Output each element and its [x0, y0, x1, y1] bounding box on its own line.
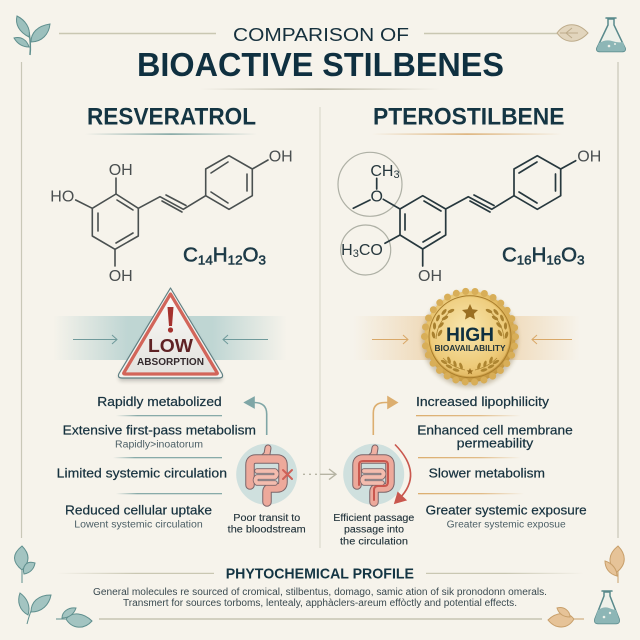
caption: efficient passage — [333, 513, 415, 547]
icon: teal leaf bottom — [56, 608, 92, 627]
absorption band — [53, 316, 287, 360]
chemical structure: pterostilbene: 3 — [353, 248, 359, 260]
molecular formula: resveratrol: O — [243, 244, 259, 266]
icon: orange leaves top right — [605, 546, 624, 583]
list: resveratrol properties: Lowent systemic circulation — [74, 520, 203, 531]
icon: flask bottom right — [595, 591, 619, 624]
heading: resveratrol: RESVERATROL — [87, 104, 256, 130]
list: pterostilbene properties: permeability — [457, 436, 534, 450]
molecular formula: resveratrol: 3 — [259, 252, 266, 268]
caption: efficient passage: passage into — [344, 525, 404, 536]
footer body text: Transmert for sources torboms, lentealy, apphàclers-areum effòctly and potential effects. — [123, 598, 517, 609]
molecular formula: resveratrol: 14 — [198, 252, 213, 268]
frame lines and central divider — [22, 62, 618, 548]
footer — [14, 546, 624, 627]
arrow: inward right — [223, 335, 268, 344]
list: pterostilbene properties: Increased lipophilicity — [416, 394, 550, 409]
exclamation mark — [168, 307, 174, 326]
badge text: low: LOW — [148, 336, 193, 356]
molecular formula: resveratrol: C — [183, 244, 197, 266]
footer rule left — [57, 573, 214, 574]
footer body text — [93, 587, 547, 609]
chemical structure: pterostilbene: CO — [359, 242, 383, 259]
caption: poor transit — [228, 513, 306, 536]
arrow: inward right — [532, 335, 572, 344]
list: pterostilbene properties: Enhanced cell membrane — [417, 422, 573, 437]
badge: high bioavailability — [422, 291, 518, 388]
arrow: dotted comparison — [303, 469, 336, 480]
molecular formula: pterostilbene: H — [532, 244, 546, 266]
molecular formula: resveratrol: 12 — [228, 252, 243, 268]
caption: poor transit: the bloodstream — [228, 525, 306, 536]
icon: teal leaves top left — [14, 546, 35, 583]
chemical structure: pterostilbene: 3 — [393, 169, 400, 181]
list: pterostilbene properties: Greater systemic exposure — [426, 502, 587, 517]
list: resveratrol properties: Limited systemic circulation — [57, 466, 227, 481]
icon: flask — [597, 18, 625, 52]
chemical structure: pterostilbene: O — [370, 188, 383, 206]
icon: orange leaf bottom — [548, 608, 584, 627]
chemical structure: pterostilbene: H — [341, 242, 353, 259]
molecular formula: pterostilbene: O — [561, 244, 577, 266]
header — [14, 16, 625, 90]
list: pterostilbene properties: Greater systemic exposue — [447, 520, 566, 531]
badge text: absorption: ABSORPTION — [137, 357, 204, 368]
bioavailability band — [353, 316, 580, 360]
panel: resveratrol — [50, 104, 306, 536]
list: resveratrol properties: Extensive first-pass metabolism — [63, 422, 256, 437]
badge text: bioavailability: BIOAVAILABILITY — [434, 343, 506, 353]
footer heading: PHYTOCHEMICAL PROFILE — [226, 566, 414, 582]
heading underline — [372, 133, 562, 135]
icon: intestine poor transit — [236, 444, 297, 505]
footer rule right — [426, 573, 584, 574]
title line 2: BIOACTIVE STILBENES — [137, 46, 504, 83]
arrow: inward left — [73, 335, 117, 344]
list: resveratrol properties: Rapidly metabolized — [97, 394, 222, 409]
chemical structure: pterostilbene: CH — [370, 163, 393, 180]
arrow: inward left — [372, 335, 408, 344]
chemical structure: resveratrol: OH — [109, 268, 133, 285]
chemical structure: pterostilbene: OH — [418, 268, 442, 285]
molecular formula: pterostilbene: 3 — [577, 252, 584, 268]
chemical structure: pterostilbene — [338, 148, 601, 285]
arrow: curved orange up — [373, 397, 397, 435]
title underline — [200, 88, 440, 90]
molecular formula: pterostilbene: C — [502, 244, 516, 266]
list: pterostilbene properties — [416, 394, 587, 531]
heading: pterostilbene: PTEROSTILBENE — [373, 104, 564, 130]
badge text: high: HIGH — [446, 325, 494, 346]
icon: tan leaf — [557, 25, 588, 41]
list: resveratrol properties: Rapidly>inoatorum — [115, 440, 203, 451]
title line 1: COMPARISON OF — [233, 25, 409, 45]
list: resveratrol properties — [57, 394, 256, 531]
footer body text: General molecules re sourced of cromical, stilbentus, domago, samic ation of sik pronodonn omerals. — [93, 587, 547, 598]
badge: low absorption warning — [118, 288, 223, 381]
chemical structure: resveratrol: OH — [109, 162, 133, 179]
icon: intestine efficient passage — [343, 444, 404, 505]
molecular formula: resveratrol: H — [213, 244, 228, 266]
list: pterostilbene properties: Slower metabolism — [429, 466, 545, 481]
chemical structure: resveratrol: OH — [269, 148, 293, 166]
chemical structure: resveratrol: HO — [50, 188, 74, 206]
chemical structure: pterostilbene: OH — [577, 148, 601, 166]
arrow: curved teal up — [245, 398, 267, 435]
molecular formula: pterostilbene: 16 — [546, 252, 561, 268]
header rule left — [59, 32, 216, 34]
caption: efficient passage: the circulation — [340, 536, 408, 547]
chemical structure: resveratrol — [50, 148, 293, 285]
header rule right — [424, 32, 560, 34]
icon: teal sprig — [14, 16, 50, 55]
list: resveratrol properties: Reduced cellular uptake — [65, 502, 212, 517]
caption: efficient passage: Efficient passage — [333, 513, 415, 524]
icon: star — [462, 304, 478, 320]
icon: teal sprig bottom left — [19, 593, 51, 624]
arrow: red flow arc — [395, 444, 411, 503]
laurel wreath — [431, 308, 509, 372]
caption: poor transit: Poor transit to — [233, 513, 301, 524]
heading underline — [85, 133, 257, 135]
panel: pterostilbene — [333, 104, 601, 547]
molecular formula: pterostilbene: 16 — [517, 252, 532, 268]
footer bottom rule — [99, 618, 542, 620]
